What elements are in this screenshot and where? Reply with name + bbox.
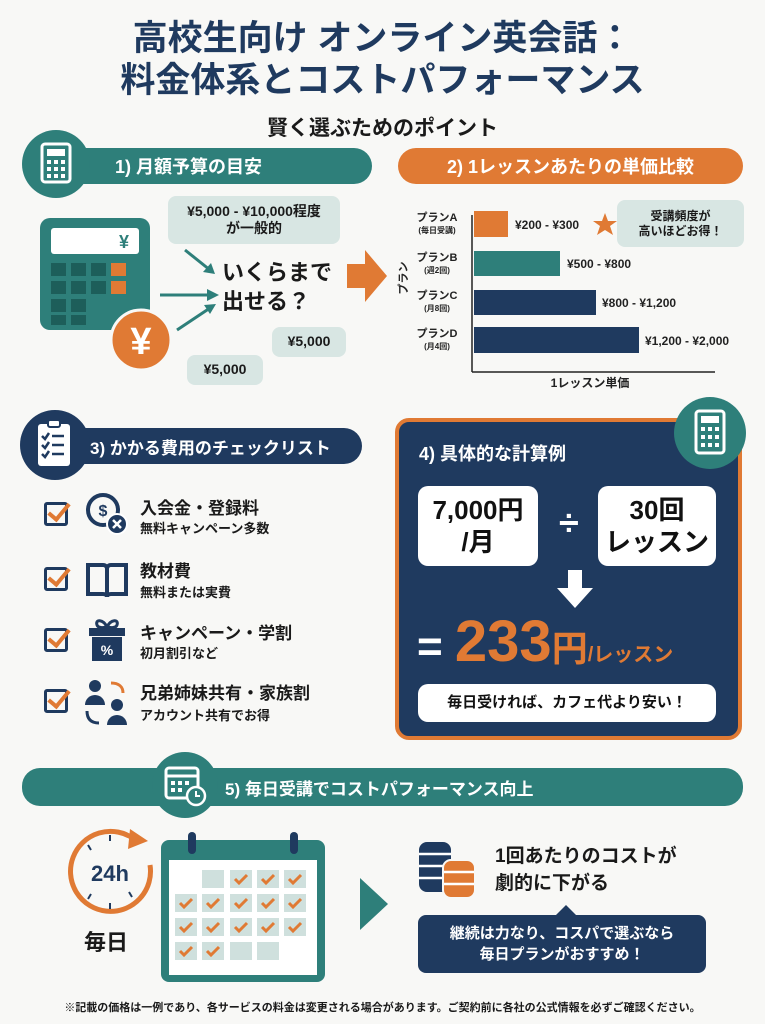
panel 4 heading: 4) 具体的な計算例 [419, 444, 566, 464]
checklist item 3 [44, 619, 292, 661]
header 1 [40, 148, 372, 184]
subtitle: 賢く選ぶためのポイント [267, 117, 498, 140]
title: 料金体系とコストパフォーマンス [120, 61, 645, 100]
header 1: 1) 月額予算の目安 [115, 157, 262, 177]
checklist item 4: アカウント共有でお得 [140, 708, 270, 723]
callout: cafe [418, 684, 716, 722]
bar chart: プランC [417, 289, 458, 302]
icon: book [86, 563, 128, 597]
icon: big calculator with yen [40, 218, 170, 368]
callout: frequency [617, 200, 744, 247]
icon: 24h clock: 24h [91, 861, 129, 886]
icon: gift [89, 619, 125, 661]
checklist item 2: 無料または実費 [140, 585, 231, 600]
text: cost drops: 1回あたりのコストが [495, 846, 677, 867]
title [120, 19, 645, 100]
footnote: ※記載の価格は一例であり、各サービスの料金は変更される場合があります。ご契約前に各社の公式情報を必ずご確認ください。 [64, 1002, 701, 1014]
bar chart: ¥800 - ¥1,200 [602, 296, 676, 310]
bubble: 5000 right [272, 327, 346, 357]
box: lessons [598, 486, 716, 566]
arrows to question [160, 248, 219, 332]
checklist item 4: 兄弟姉妹共有・家族割 [140, 684, 310, 703]
divide sign: ÷ [559, 502, 579, 543]
bar chart [397, 211, 729, 390]
arrow: orange right [347, 250, 387, 302]
box: monthly: 7,000円 [432, 494, 524, 524]
bar chart: ¥500 - ¥800 [567, 257, 631, 271]
box: lessons: レッスン [605, 527, 709, 557]
bubble: 5000 left: ¥5,000 [204, 361, 246, 377]
bar chart: プランD [417, 327, 458, 340]
calendar [161, 832, 325, 982]
callout: recommendation [418, 915, 706, 973]
bar chart: (週2回) [424, 265, 450, 275]
bubble: typical range: が一般的 [226, 220, 282, 236]
text: cost drops: 劇的に下がる [495, 873, 609, 894]
question text: 出せる？ [222, 289, 310, 314]
checklist item 3: キャンペーン・学割 [140, 624, 292, 643]
box: monthly: /月 [461, 527, 495, 557]
panel 4: calculation example [395, 418, 742, 740]
title: 高校生向け オンライン英会話： [133, 19, 632, 58]
bar chart: (毎日受講) [418, 225, 456, 235]
icon: calendar clock [152, 752, 218, 818]
box: monthly [418, 486, 538, 566]
icon: coins [419, 842, 474, 897]
icon: big calculator with yen: ¥ [119, 232, 129, 252]
header 5 [22, 768, 743, 806]
icon: calculator header 1 [22, 130, 90, 198]
icon: gift: % [101, 642, 114, 658]
header 2: 2) 1レッスンあたりの単価比較 [447, 157, 694, 177]
callout: recommendation: 毎日プランがおすすめ！ [479, 946, 644, 963]
checklist item 1 [44, 493, 269, 536]
checklist item 2 [44, 562, 231, 600]
icon: calculator panel 4 [674, 397, 746, 469]
callout: recommendation: 継続は力なり、コスパで選ぶなら [450, 925, 674, 942]
icon: big calculator with yen: ¥ [130, 321, 152, 363]
bubble: 5000 left [187, 355, 263, 385]
bubble: 5000 right: ¥5,000 [288, 333, 330, 349]
icon: 24h clock [68, 828, 153, 914]
question text [222, 260, 332, 314]
bar chart: プランA [417, 211, 458, 224]
icon: coin x: $ [99, 503, 108, 520]
box: lessons: 30回 [630, 494, 684, 524]
callout: frequency: 受講頻度が [650, 208, 710, 222]
bubble: typical range [168, 196, 340, 244]
bar chart: ¥1,200 - ¥2,000 [645, 334, 729, 348]
checklist item 3: 初月割引など [140, 646, 218, 661]
callout: cafe: 毎日受ければ、カフェ代より安い！ [447, 694, 687, 711]
question text: いくらまで [222, 260, 332, 285]
bar chart: プランB [417, 251, 458, 264]
bar chart: プラン [397, 262, 410, 294]
icon: family [85, 680, 127, 725]
header 3: 3) かかる費用のチェックリスト [90, 438, 331, 458]
checklist item 2: 教材費 [140, 562, 191, 581]
arrow down [557, 570, 593, 608]
header 3 [40, 428, 362, 464]
header 2 [398, 148, 743, 184]
checklist item 1: 無料キャンペーン多数 [140, 521, 269, 536]
result: = 233円/レッスン [417, 609, 673, 674]
bar chart: (月8回) [424, 304, 450, 313]
bubble: typical range: ¥5,000 - ¥10,000程度 [187, 202, 321, 218]
bar chart: 1レッスン単価 [551, 375, 629, 390]
arrow: teal triangle [360, 878, 388, 930]
checklist item 4 [44, 680, 310, 725]
icon: clipboard [20, 410, 90, 480]
icon: coin x [86, 493, 128, 535]
callout: frequency: 高いほどお得！ [638, 224, 722, 238]
bar chart: (月4回) [424, 342, 450, 351]
text: cost drops [495, 846, 677, 894]
checklist item 1: 入会金・登録料 [140, 499, 259, 518]
bar chart: ¥200 - ¥300 [515, 218, 579, 232]
label: every day: 毎日 [84, 930, 128, 955]
header 5: 5) 毎日受講でコストパフォーマンス向上 [225, 780, 534, 798]
